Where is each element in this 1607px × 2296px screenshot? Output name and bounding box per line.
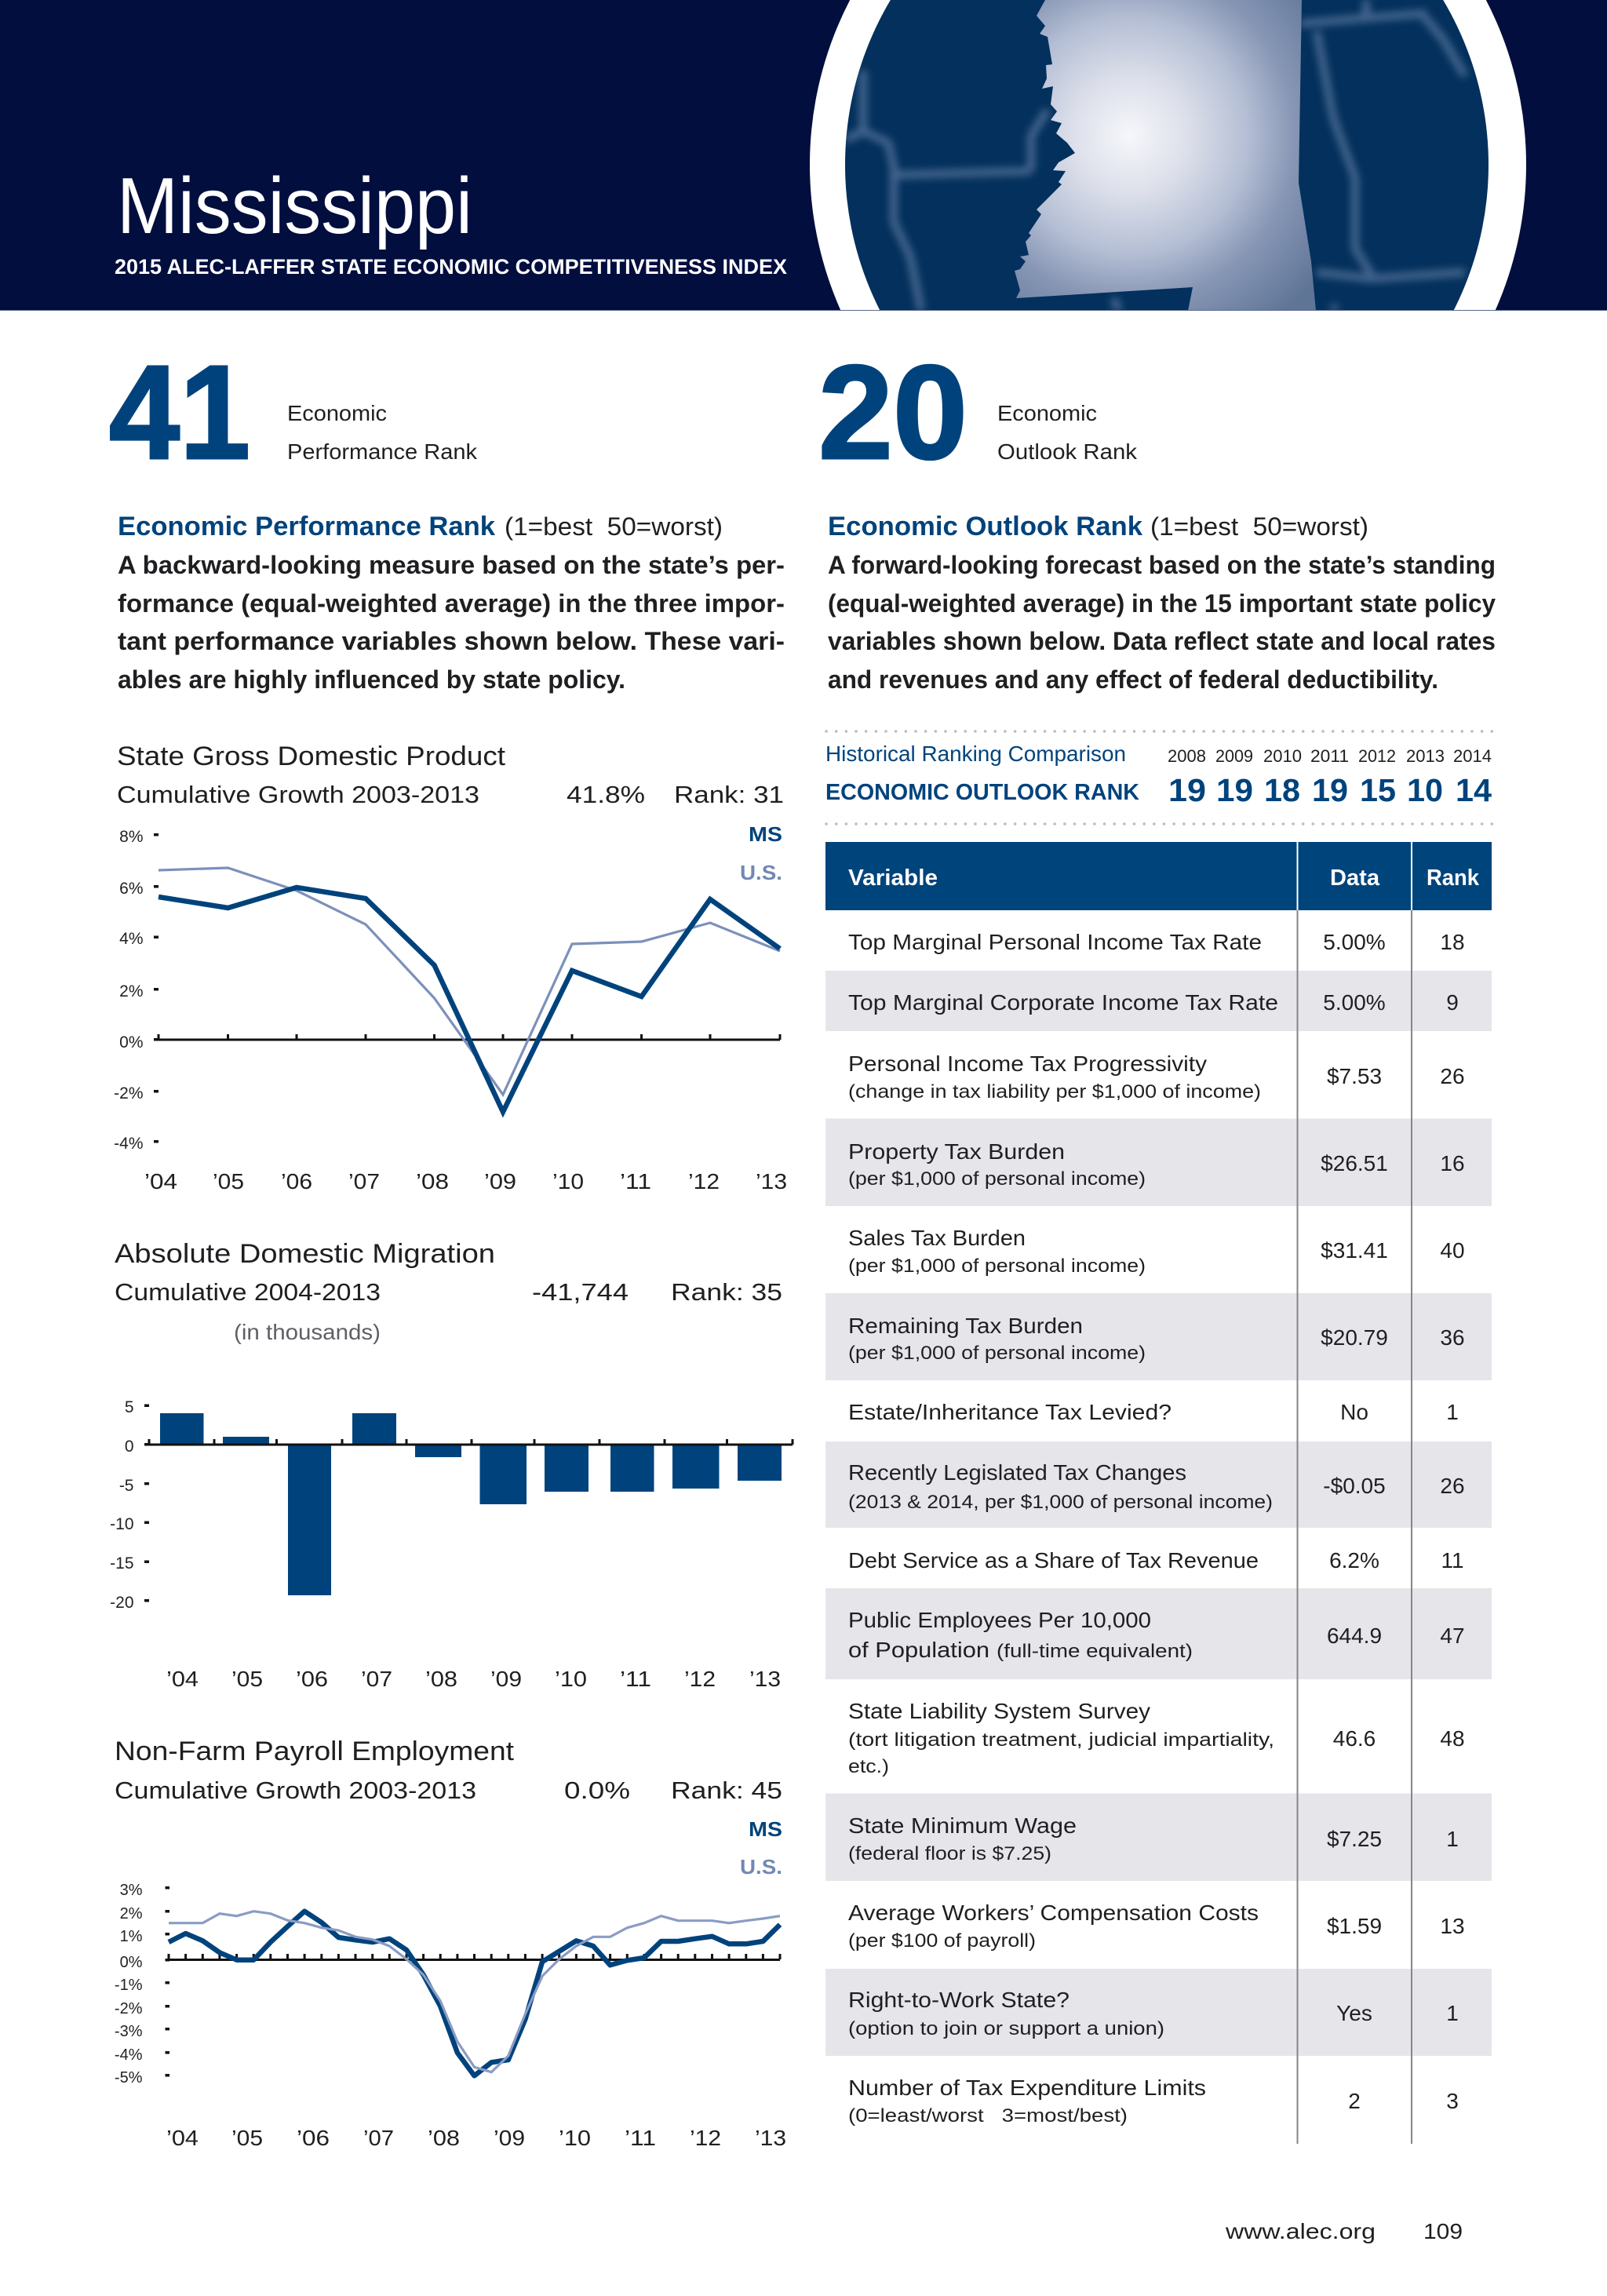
x axis years: ’10	[559, 2126, 591, 2150]
row: sales tax burden: $31.41	[1321, 1238, 1388, 1263]
x axis years: ’11	[625, 2126, 656, 2150]
line chart: gdp growth: -4%	[114, 1135, 143, 1153]
years row: 2014	[1453, 746, 1492, 766]
rank callout: economic outlook 20	[818, 338, 1138, 487]
panel: historical ranking comparison: ECONOMIC OUTLOOK RANK	[825, 780, 1139, 805]
bar chart: migration	[110, 1398, 793, 1691]
x axis years: ’12	[690, 2126, 721, 2150]
x axis years: ’08	[425, 1667, 457, 1691]
bar chart: migration: -5	[119, 1477, 133, 1495]
line chart: employment growth	[115, 1817, 786, 2150]
row: top marginal corporate income tax rate: Top Marginal Corporate Income Tax Rate	[848, 990, 1278, 1015]
x axis years: ’13	[756, 1169, 787, 1194]
line chart: employment growth: 1%	[120, 1928, 143, 1945]
row: recently legislated tax changes	[848, 1460, 1465, 1513]
rank callout: economic performance 41	[109, 338, 478, 487]
heading: migration: -41,744	[532, 1278, 629, 1306]
row: right-to-work state	[848, 1988, 1459, 2039]
years row: 2013	[1406, 746, 1445, 766]
row: state liability system survey: 46.6	[1333, 1726, 1376, 1751]
rank callout: economic outlook 20: 20	[818, 338, 967, 487]
row: right-to-work state: Yes	[1336, 2001, 1372, 2025]
row: remaining tax burden: Remaining Tax Burden	[848, 1314, 1083, 1338]
ranks row: 10	[1407, 772, 1443, 808]
x axis years: ’04	[144, 1169, 177, 1194]
x axis years: ’07	[363, 2126, 394, 2150]
row: right-to-work state: 1	[1446, 2001, 1459, 2025]
row: tax expenditure limits: (0=least/worst 3=most/best)	[848, 2105, 1128, 2127]
x axis years: ’08	[428, 2126, 460, 2150]
x axis years	[166, 1667, 781, 1691]
ranks row	[1168, 772, 1492, 808]
heading: gdp: State Gross Domestic Product	[117, 742, 506, 771]
line chart: gdp growth: 8%	[119, 828, 143, 846]
row: state liability system survey: State Liability System Survey	[848, 1699, 1150, 1723]
row: personal income tax progressivity: Personal Income Tax Progressivity	[848, 1051, 1207, 1076]
row: personal income tax progressivity: 26	[1440, 1064, 1465, 1088]
row: personal income tax progressivity	[848, 1051, 1465, 1102]
text block: performance rank description: formance (equal-weighted average) in the three impor-	[118, 589, 785, 618]
rank callout: economic performance 41: Economic	[287, 401, 387, 425]
text block: outlook rank description: variables shown below. Data reflect state and local rates	[828, 627, 1496, 655]
x axis years: ’08	[416, 1169, 449, 1194]
row: estate or inheritance tax: 1	[1446, 1400, 1459, 1424]
heading: employment: Rank: 45	[671, 1777, 782, 1804]
row: sales tax burden: 40	[1440, 1238, 1465, 1263]
heading: employment: Non-Farm Payroll Employment	[115, 1737, 515, 1766]
line chart: employment growth: -1%	[115, 1977, 143, 1994]
heading: employment: Cumulative Growth 2003-2013	[115, 1777, 476, 1804]
row: debt service: 6.2%	[1329, 1548, 1379, 1573]
row: state liability system survey: etc.)	[848, 1756, 889, 1777]
heading: migration: Absolute Domestic Migration	[115, 1239, 495, 1269]
panel: historical ranking comparison	[825, 731, 1492, 824]
line chart: gdp growth: 6%	[119, 880, 143, 898]
rank callout: economic performance 41: Performance Rank	[287, 439, 478, 464]
row: debt service	[848, 1548, 1464, 1573]
heading: gdp: 41.8%	[567, 781, 645, 808]
x axis years: ’11	[620, 1667, 651, 1691]
panel: absolute domestic migration	[110, 1239, 793, 1691]
x axis years: ’12	[684, 1667, 716, 1691]
ranks row: 19	[1216, 772, 1253, 808]
bar chart: migration: 0	[125, 1438, 133, 1456]
text block: performance rank description: ables are highly influenced by state policy.	[118, 665, 625, 694]
row: public employees: 644.9	[1327, 1624, 1382, 1648]
x axis years: ’13	[755, 2126, 786, 2150]
row: top marginal corporate income tax rate: 5.00%	[1323, 990, 1386, 1015]
subtitle: 2015 ALEC-LAFFER STATE ECONOMIC COMPETITIVENESS INDEX	[115, 255, 787, 279]
line chart: employment growth: -4%	[115, 2046, 143, 2064]
row: tax expenditure limits: Number of Tax Expenditure Limits	[848, 2076, 1206, 2100]
row: tax expenditure limits: 3	[1446, 2089, 1459, 2113]
row: state minimum wage: $7.25	[1327, 1827, 1382, 1851]
ranks row: 19	[1312, 772, 1348, 808]
row: top marginal personal income tax rate: 18	[1440, 930, 1465, 954]
row: remaining tax burden	[848, 1314, 1465, 1364]
bar chart: migration: 5	[125, 1398, 133, 1416]
row: debt service: Debt Service as a Share of Tax Revenue	[848, 1548, 1259, 1573]
row: public employees: (full-time equivalent)	[997, 1641, 1193, 1662]
x axis years	[166, 2126, 786, 2150]
rank callout: economic outlook 20: Economic	[997, 401, 1097, 425]
row: remaining tax burden: (per $1,000 of personal income)	[848, 1343, 1146, 1364]
years row: 2012	[1358, 746, 1396, 766]
line chart: employment growth: -3%	[115, 2023, 143, 2040]
row: right-to-work state: (option to join or support a union)	[848, 2018, 1164, 2039]
x axis years: ’09	[490, 1667, 522, 1691]
text block: performance rank description	[118, 512, 785, 694]
x axis years: ’07	[348, 1169, 380, 1194]
row: personal income tax progressivity: (change in tax liability per $1,000 of income)	[848, 1081, 1261, 1102]
rank callout: economic performance 41: 41	[109, 338, 250, 487]
legend: MS and U.S.	[740, 1817, 782, 1879]
row: state minimum wage: State Minimum Wage	[848, 1813, 1077, 1838]
row: workers compensation costs: (per $100 of payroll)	[848, 1930, 1036, 1952]
line chart: gdp growth: -2%	[114, 1084, 143, 1102]
line chart: employment growth: -5%	[115, 2069, 143, 2086]
x axis years: ’10	[552, 1169, 584, 1194]
row: estate or inheritance tax: Estate/Inheritance Tax Levied?	[848, 1400, 1172, 1424]
footer: website and page number	[1225, 2219, 1463, 2243]
row: state liability system survey: 48	[1440, 1726, 1465, 1751]
line chart: employment growth: 2%	[120, 1905, 143, 1922]
x axis years: ’06	[297, 2126, 330, 2150]
table header: Rank	[1427, 866, 1480, 891]
ranks row: 19	[1168, 772, 1206, 808]
bar chart: migration: -15	[110, 1554, 133, 1573]
heading: employment	[115, 1737, 782, 1804]
row: workers compensation costs: $1.59	[1327, 1914, 1382, 1938]
row: sales tax burden: (per $1,000 of personal income)	[848, 1256, 1146, 1277]
ranks row: 14	[1456, 772, 1492, 808]
row: workers compensation costs	[848, 1901, 1465, 1952]
x axis years: ’05	[231, 2126, 263, 2150]
row: estate or inheritance tax: No	[1340, 1400, 1368, 1424]
panel: historical ranking comparison: Historical Ranking Comparison	[825, 742, 1126, 766]
row: recently legislated tax changes: 26	[1440, 1474, 1465, 1498]
row: state minimum wage: (federal floor is $7.25)	[848, 1843, 1051, 1864]
line chart: gdp growth: 2%	[119, 982, 143, 1000]
legend: MS and U.S.: U.S.	[740, 861, 782, 884]
line chart: employment growth: 0%	[120, 1954, 143, 1971]
row: top marginal corporate income tax rate	[848, 990, 1459, 1015]
row: top marginal corporate income tax rate: 9	[1446, 990, 1459, 1015]
row: tax expenditure limits: 2	[1348, 2089, 1361, 2113]
x axis years: ’10	[555, 1667, 587, 1691]
line chart: employment growth: 3%	[120, 1882, 143, 1899]
x axis years: ’09	[494, 2126, 525, 2150]
years row: 2009	[1215, 746, 1253, 766]
years row	[1168, 746, 1492, 766]
row: top marginal personal income tax rate: Top Marginal Personal Income Tax Rate	[848, 930, 1262, 954]
rank callout: economic outlook 20: Outlook Rank	[997, 439, 1138, 464]
map medallion with Mississippi state shape	[810, 0, 1526, 310]
row: state liability system survey	[848, 1699, 1465, 1777]
heading: employment: 0.0%	[564, 1777, 630, 1804]
legend: MS and U.S.: MS	[749, 822, 782, 846]
row: top marginal personal income tax rate	[848, 930, 1465, 954]
footer: website and page number: www.alec.org	[1225, 2219, 1376, 2243]
row: workers compensation costs: Average Workers’ Compensation Costs	[848, 1901, 1259, 1925]
row: public employees: Public Employees Per 10,000	[848, 1608, 1151, 1632]
row: personal income tax progressivity: $7.53	[1327, 1064, 1382, 1088]
x axis years: ’05	[231, 1667, 263, 1691]
text block: outlook rank description: Economic Outlook Rank	[828, 512, 1142, 541]
x axis years: ’06	[296, 1667, 328, 1691]
footer: website and page number: 109	[1423, 2219, 1463, 2243]
table header: Data	[1330, 866, 1380, 891]
x axis years: ’13	[749, 1667, 781, 1691]
line chart: employment growth: -2%	[115, 2000, 143, 2017]
panel: non-farm payroll employment	[115, 1737, 786, 2150]
row: state liability system survey: (tort litigation treatment, judicial impartiality,	[848, 1729, 1274, 1751]
x axis years: ’04	[166, 2126, 199, 2150]
text block: outlook rank description	[828, 512, 1496, 694]
row: public employees: 47	[1440, 1624, 1465, 1648]
x axis years	[144, 1169, 787, 1194]
text block: performance rank description: A backward-looking measure based on the state’s per-	[118, 551, 785, 579]
x axis years: ’07	[361, 1667, 392, 1691]
table header: Variable	[848, 866, 938, 891]
row: tax expenditure limits	[848, 2076, 1459, 2127]
heading: gdp: Cumulative Growth 2003-2013	[117, 781, 479, 808]
x axis years: ’09	[484, 1169, 516, 1194]
years row: 2010	[1263, 746, 1302, 766]
row: remaining tax burden: $20.79	[1321, 1325, 1388, 1350]
text block: outlook rank description: (equal-weighted average) in the 15 important state policy	[828, 589, 1496, 618]
row: public employees	[848, 1608, 1465, 1662]
bar chart: migration: -10	[110, 1515, 133, 1533]
row: state minimum wage: 1	[1446, 1827, 1459, 1851]
row: state minimum wage	[848, 1813, 1459, 1864]
row: recently legislated tax changes: (2013 & 2014, per $1,000 of personal income)	[848, 1492, 1273, 1513]
x axis years: ’05	[213, 1169, 244, 1194]
row: right-to-work state: Right-to-Work State?	[848, 1988, 1070, 2012]
heading: migration: (in thousands)	[234, 1320, 381, 1344]
x axis years: ’12	[688, 1169, 720, 1194]
row: remaining tax burden: 36	[1440, 1325, 1465, 1350]
legend: MS and U.S.: U.S.	[740, 1855, 782, 1879]
years row: 2011	[1310, 746, 1349, 766]
header banner	[0, 0, 1607, 311]
line chart: gdp growth: 4%	[119, 930, 143, 948]
row: property tax burden	[848, 1139, 1465, 1190]
heading: gdp	[117, 742, 784, 808]
title: Mississippi	[117, 162, 472, 250]
years row: 2008	[1168, 746, 1206, 766]
ranks row: 15	[1360, 772, 1396, 808]
text block: outlook rank description: A forward-looking forecast based on the state’s standing	[828, 551, 1496, 579]
bar chart: migration: -20	[110, 1594, 133, 1612]
line chart: gdp growth	[114, 822, 787, 1194]
heading: migration: Cumulative 2004-2013	[115, 1278, 381, 1306]
table header	[825, 842, 1492, 910]
heading: migration	[115, 1239, 782, 1344]
row: property tax burden: $26.51	[1321, 1151, 1388, 1175]
legend: MS and U.S.: MS	[749, 1817, 782, 1841]
row: workers compensation costs: 13	[1440, 1914, 1465, 1938]
panel: state gross domestic product	[114, 742, 787, 1194]
text block: outlook rank description: (1=best 50=worst)	[1150, 512, 1368, 541]
x axis years: ’04	[166, 1667, 199, 1691]
text block: performance rank description: (1=best 50=worst)	[505, 512, 723, 541]
row: recently legislated tax changes: -$0.05	[1323, 1474, 1386, 1498]
ranks row: 18	[1264, 772, 1300, 808]
line chart: gdp growth: 0%	[119, 1033, 143, 1051]
row: sales tax burden: Sales Tax Burden	[848, 1226, 1026, 1250]
row: debt service: 11	[1441, 1548, 1464, 1573]
text block: outlook rank description: and revenues and any effect of federal deductibility.	[828, 665, 1438, 694]
row: estate or inheritance tax	[848, 1400, 1459, 1424]
row: property tax burden: Property Tax Burden	[848, 1139, 1065, 1164]
heading: migration: Rank: 35	[671, 1278, 782, 1306]
text block: performance rank description: Economic Performance Rank	[118, 512, 495, 541]
row: property tax burden: 16	[1440, 1151, 1465, 1175]
row: top marginal personal income tax rate: 5.00%	[1323, 930, 1386, 954]
x axis years: ’11	[620, 1169, 651, 1194]
row: recently legislated tax changes: Recently Legislated Tax Changes	[848, 1460, 1186, 1485]
row: property tax burden: (per $1,000 of personal income)	[848, 1168, 1146, 1190]
text block: performance rank description: tant performance variables shown below. These vari-	[118, 627, 785, 655]
row: public employees: of Population	[848, 1638, 989, 1662]
heading: gdp: Rank: 31	[674, 781, 784, 808]
row: sales tax burden	[848, 1226, 1465, 1277]
x axis years: ’06	[281, 1169, 312, 1194]
legend: MS and U.S.	[740, 822, 782, 884]
panel: state policy variables table	[825, 842, 1492, 2144]
